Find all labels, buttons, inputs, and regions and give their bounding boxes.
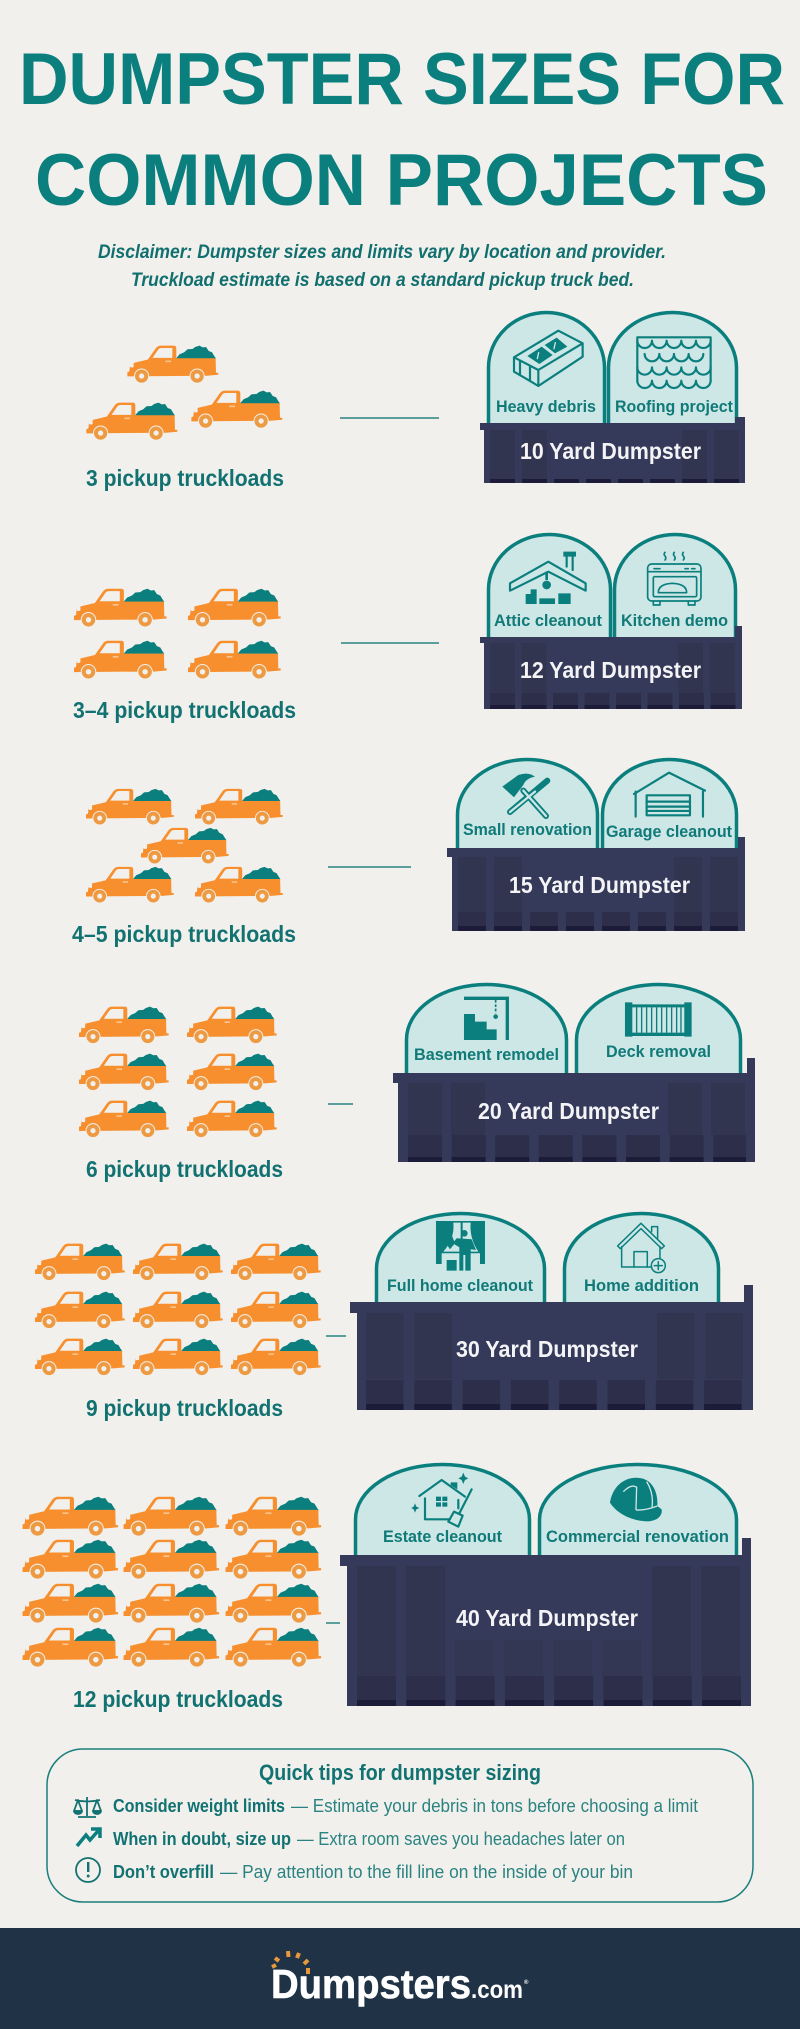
arch: kitchen demo: Kitchen demo — [621, 611, 728, 630]
title: COMMON PROJECTS — [35, 140, 768, 221]
arch: home addition: Home addition — [584, 1276, 699, 1295]
logo: wordmark: .com — [471, 1976, 523, 2004]
dumpster: 12 yard: 12 Yard Dumpster — [520, 657, 701, 683]
truckload label: 12 pickup truckloads — [73, 1686, 283, 1712]
icon: hard hat — [610, 1478, 662, 1521]
truckload label: 3 pickup truckloads — [86, 465, 284, 491]
dumpster: 10 yard: 10 Yard Dumpster — [520, 438, 701, 464]
dumpster: 40 yard: 40 Yard Dumpster — [456, 1605, 638, 1631]
arch: estate cleanout — [356, 1464, 530, 1555]
panel: 12 yard row — [73, 534, 742, 723]
dumpster: 30 yard: 30 Yard Dumpster — [456, 1336, 638, 1362]
dumpster: 40 yard — [340, 1538, 751, 1706]
dumpster: 20 yard — [393, 1058, 755, 1162]
icon: exclamation circle — [76, 1858, 100, 1882]
icon: garage — [634, 773, 705, 817]
tip 2: — Extra room saves you headaches later on — [297, 1829, 625, 1849]
truckload label: 6 pickup truckloads — [86, 1156, 283, 1182]
arch: garage cleanout — [602, 760, 736, 848]
arch: kitchen demo — [614, 534, 736, 637]
arch: small renovation — [458, 760, 598, 848]
icon: oven — [648, 552, 701, 605]
arch: home addition — [564, 1213, 718, 1302]
truckload label: 4–5 pickup truckloads — [72, 921, 296, 947]
dumpster: 30 yard — [350, 1285, 753, 1410]
arch: attic cleanout — [488, 534, 610, 637]
tip 2: When in doubt, size up — [113, 1829, 291, 1849]
footer — [0, 1928, 800, 2029]
truckload label: 3–4 pickup truckloads — [73, 697, 296, 723]
truck group: 12 pickup trucks — [23, 1497, 321, 1668]
panel: 15 yard row — [72, 760, 745, 947]
icon: cinder block — [514, 331, 583, 386]
truck group: 9 pickup trucks — [35, 1244, 321, 1376]
arch: full home cleanout — [376, 1213, 544, 1302]
icon: attic — [510, 552, 586, 604]
truck group: 6 pickup trucks — [79, 1007, 277, 1138]
dumpster: 15 yard: 15 Yard Dumpster — [509, 872, 690, 898]
arch: heavy debris: Heavy debris — [496, 397, 596, 416]
arch: deck removal: Deck removal — [606, 1042, 711, 1061]
panel: 40 yard row — [23, 1464, 751, 1712]
arch: small renovation: Small renovation — [463, 820, 592, 839]
arch: roofing project: Roofing project — [615, 397, 733, 416]
dumpster: 10 yard — [480, 417, 745, 483]
arch: basement remodel — [406, 984, 566, 1073]
disclaimer: Truckload estimate is based on a standard pickup truck bed. — [131, 270, 634, 291]
tip 3: Don’t overfill — [113, 1862, 214, 1882]
arch: estate cleanout: Estate cleanout — [383, 1527, 502, 1546]
icon: deck railing — [625, 1002, 692, 1037]
arch: commercial renovation: Commercial renovation — [546, 1527, 729, 1546]
truck group: 5 pickup trucks — [86, 789, 283, 903]
panel: 10 yard row — [86, 312, 745, 491]
icon: hammer and screwdriver — [502, 774, 547, 816]
dumpster: 12 yard — [480, 626, 742, 709]
tip 2 — [113, 1829, 625, 1849]
arch: garage cleanout: Garage cleanout — [606, 822, 732, 841]
truckload label: 9 pickup truckloads — [86, 1395, 283, 1421]
dumpster: 20 yard: 20 Yard Dumpster — [478, 1098, 659, 1124]
arch: heavy debris — [488, 312, 604, 423]
truck group: 3 pickup trucks — [86, 346, 282, 441]
arch: commercial renovation — [540, 1464, 736, 1555]
logo: sun rays — [272, 1951, 308, 1974]
tips heading: Quick tips for dumpster sizing — [259, 1760, 541, 1785]
logo: wordmark: ® — [524, 1979, 529, 1986]
icon: roof shingles — [637, 337, 711, 388]
arch: roofing project — [608, 312, 736, 423]
truck group: 4 pickup trucks — [74, 589, 281, 680]
title — [19, 39, 785, 221]
panel: quick tips — [47, 1749, 753, 1902]
tip 1: Consider weight limits — [113, 1796, 285, 1816]
dumpster: 15 yard — [447, 837, 745, 931]
tip 1: — Estimate your debris in tons before choosing a limit — [291, 1796, 698, 1816]
panel: 30 yard row — [35, 1213, 753, 1421]
icon: trend arrow — [77, 1829, 100, 1846]
disclaimer: Disclaimer: Dumpster sizes and limits vary by location and provider. — [98, 242, 666, 263]
panel: 20 yard row — [79, 984, 755, 1182]
disclaimer — [98, 242, 666, 291]
tip 1 — [113, 1796, 698, 1816]
arch: deck removal — [576, 985, 740, 1073]
icon: window cleaner — [436, 1221, 485, 1271]
icon: scale — [74, 1797, 101, 1817]
icon: basement stairs — [464, 997, 509, 1040]
arch: basement remodel: Basement remodel — [414, 1045, 559, 1064]
icon: estate house and broom — [411, 1473, 472, 1527]
arch: full home cleanout: Full home cleanout — [387, 1276, 533, 1295]
logo: wordmark: Dumpsters — [271, 1961, 471, 2007]
tip 3: — Pay attention to the fill line on the inside of your bin — [220, 1862, 633, 1882]
icon: home addition — [618, 1223, 665, 1273]
arch: attic cleanout: Attic cleanout — [494, 611, 602, 630]
